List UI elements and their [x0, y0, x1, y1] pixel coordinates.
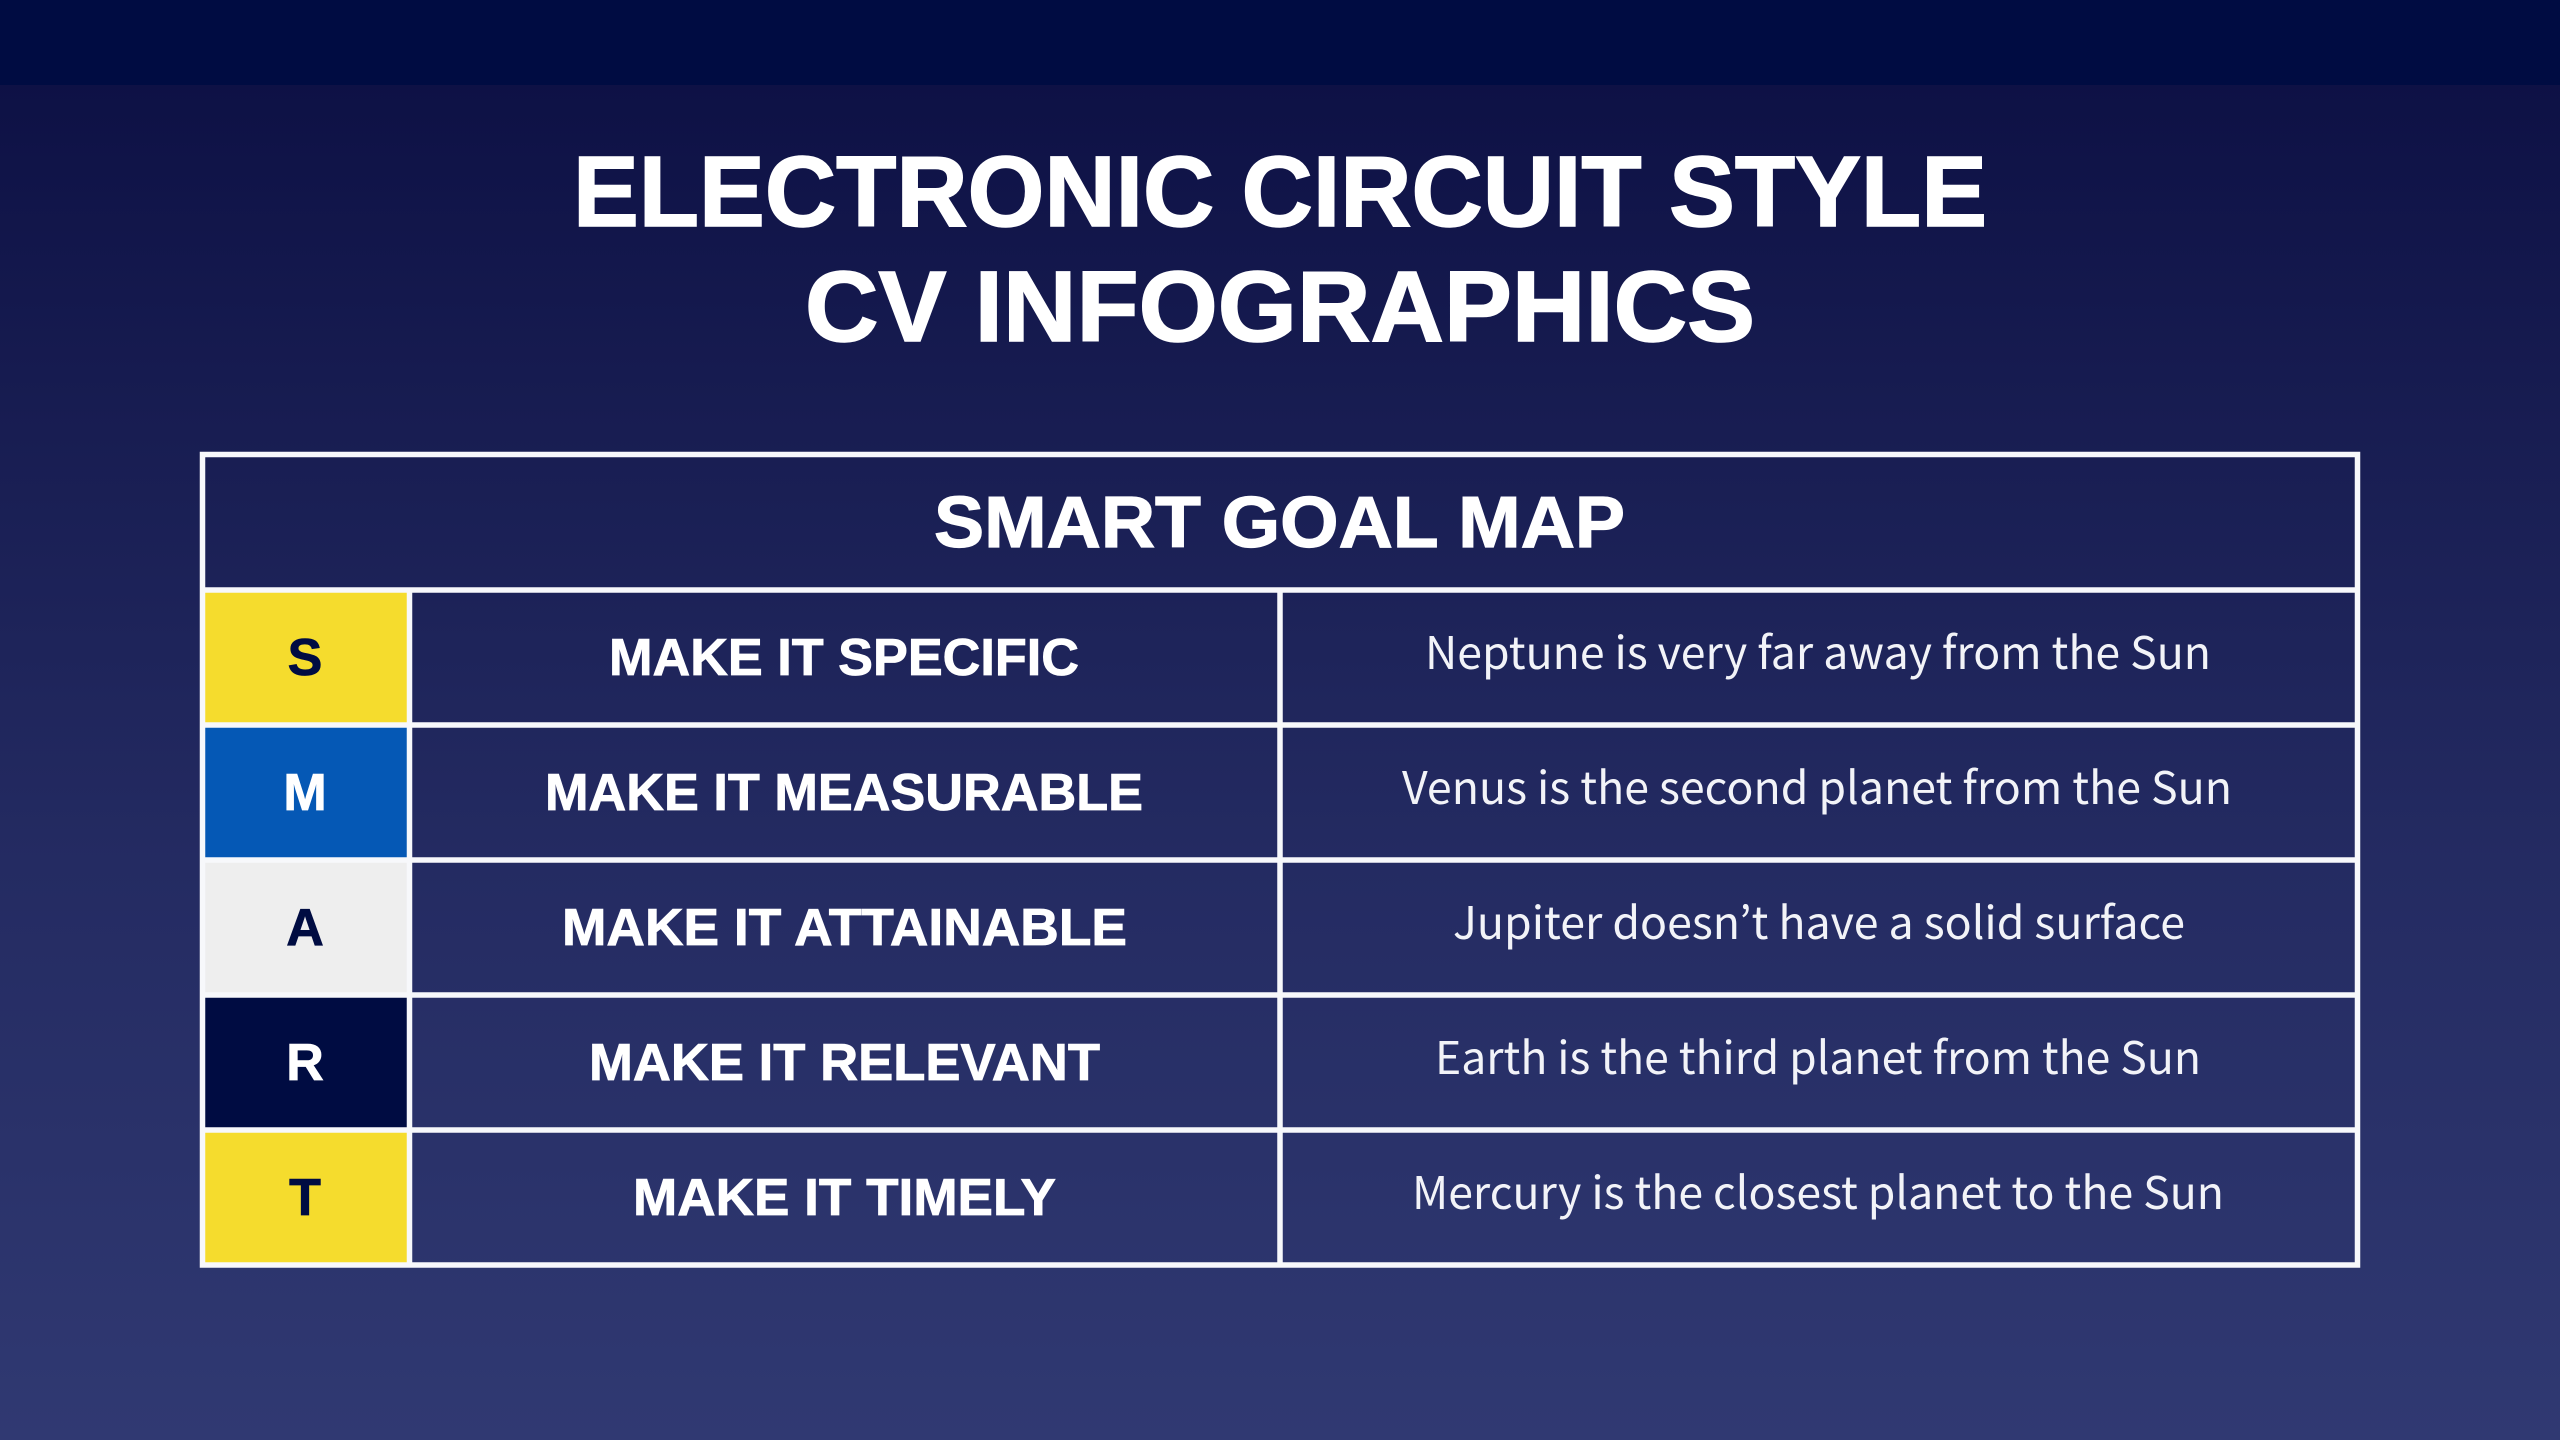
row: M — [283, 752, 2232, 822]
row: A: A — [286, 899, 324, 957]
row: S: Neptune is very far away from the Sun — [1425, 617, 2211, 682]
title — [573, 136, 1987, 363]
table: smart goal map — [200, 454, 2360, 1265]
row: M: Venus is the second planet from the Sun — [1402, 752, 2232, 817]
row: T: T — [289, 1169, 321, 1227]
row: A: Jupiter doesn’t have a solid surface — [1453, 887, 2185, 952]
row: R: R — [286, 1034, 324, 1092]
row: R: MAKE IT RELEVANT — [589, 1034, 1100, 1092]
row: A — [286, 887, 2185, 957]
row: R — [286, 1022, 2201, 1092]
letter cell fills — [204, 592, 409, 1264]
row: S: MAKE IT SPECIFIC — [609, 629, 1079, 687]
row: A: MAKE IT ATTAINABLE — [562, 899, 1127, 957]
row: T: MAKE IT TIMELY — [633, 1169, 1056, 1227]
row: T — [289, 1157, 2224, 1227]
title: ELECTRONIC CIRCUIT STYLE — [573, 136, 1987, 248]
row: M: M — [283, 764, 327, 822]
row: M: MAKE IT MEASURABLE — [545, 764, 1143, 822]
title: CV INFOGRAPHICS — [805, 251, 1755, 363]
top dark band — [0, 0, 2560, 85]
row: R: Earth is the third planet from the Sun — [1435, 1022, 2201, 1087]
row: S — [288, 617, 2211, 687]
row: S: S — [288, 629, 322, 687]
table grid lines — [200, 454, 2360, 1265]
table heading: SMART GOAL MAP — [934, 483, 1625, 563]
row: T: Mercury is the closest planet to the Sun — [1412, 1157, 2224, 1222]
